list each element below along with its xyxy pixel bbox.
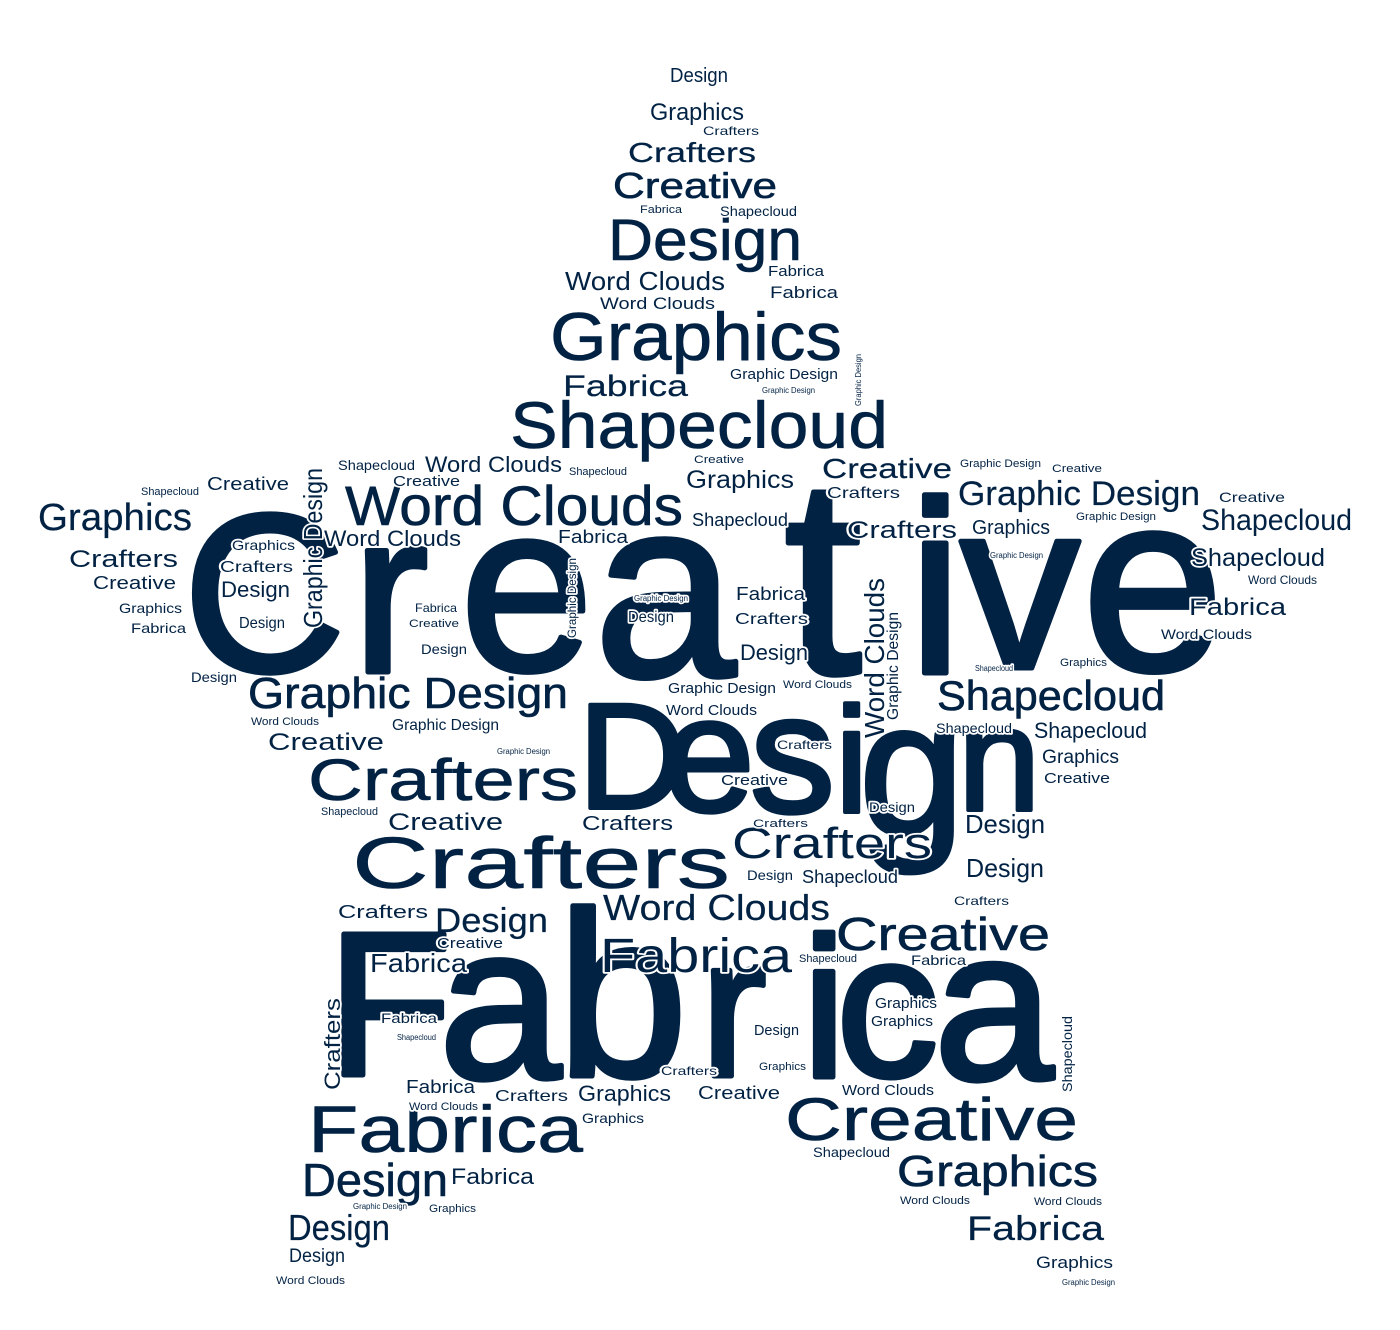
small words: bottom legs of star: Graphics xyxy=(1036,1253,1113,1272)
word: Design (large centre): D xyxy=(578,672,686,840)
word: Design (large centre): e xyxy=(663,662,755,846)
small words: lower centre: Design xyxy=(965,809,1045,839)
medium and large words: Crafters xyxy=(352,824,730,904)
small words: bottom legs of star: Creative xyxy=(698,1083,780,1103)
small words: lower centre: Creative xyxy=(437,935,503,952)
small words: lower centre: Word Clouds xyxy=(783,679,853,691)
word: Fabrica (large bottom): a xyxy=(934,884,1054,1125)
small words: centre band and left arm: Graphic Design xyxy=(298,468,328,628)
word: Creative (largest): v xyxy=(960,451,1080,719)
small words: centre band and left arm: Design xyxy=(740,640,808,665)
small words: right arm: Shapecloud xyxy=(1034,718,1147,743)
small words: lower centre: Shapecloud xyxy=(799,953,857,965)
small words: right arm: Creative xyxy=(1044,770,1110,787)
medium and large words: Shapecloud xyxy=(937,672,1165,719)
word: Fabrica (large bottom): a xyxy=(439,879,562,1125)
small words: centre band and left arm xyxy=(69,452,957,720)
word: Creative (largest): t xyxy=(784,421,863,733)
medium and large words: Crafters xyxy=(732,819,932,868)
medium and large words: Design xyxy=(302,1154,448,1206)
small words: lower centre: Shapecloud xyxy=(802,867,898,887)
small words: lower centre: Crafters xyxy=(753,818,809,830)
word: Design (large centre): g xyxy=(859,663,965,875)
word: Creative (largest): e xyxy=(460,453,593,721)
small words: bottom legs of star: Graphics xyxy=(582,1110,644,1126)
word: Design (large centre): i xyxy=(835,676,868,844)
small words: centre band and left arm: Design xyxy=(421,641,467,657)
small words: centre band and left arm: Fabrica xyxy=(415,601,457,615)
word: Design (large centre): n xyxy=(958,677,1040,842)
small words: centre band and left arm: Graphics xyxy=(686,466,794,494)
small words: bottom legs of star: Fabrica xyxy=(406,1077,476,1097)
small words: lower centre: Crafters xyxy=(338,902,428,922)
medium and large words: Creative xyxy=(836,908,1050,960)
small words: centre band and left arm: Fabrica xyxy=(131,620,186,636)
small words: lower centre xyxy=(251,679,1045,978)
small words: centre band and left arm: Fabrica xyxy=(558,527,629,547)
small words: bottom legs of star: Graphics xyxy=(429,1203,477,1215)
small words: bottom legs of star: Crafters xyxy=(495,1088,568,1105)
small words: centre band and left arm: Graphics xyxy=(119,600,182,616)
medium and large words: Design xyxy=(608,208,802,273)
small words: centre band and left arm: Creative xyxy=(207,474,289,494)
small words: right arm: Graphic Design xyxy=(990,551,1043,560)
small words: right arm: Creative xyxy=(1219,489,1285,505)
small words: centre band and left arm: Creative xyxy=(822,453,952,484)
small words: centre band and left arm: Shapecloud xyxy=(569,466,627,478)
small words: right arm xyxy=(936,458,1352,787)
small words: right arm: Graphic Design xyxy=(960,458,1041,470)
small words: centre band and left arm: Graphic Design xyxy=(634,594,688,603)
small words: right arm: Graphics xyxy=(972,517,1050,539)
small words: centre band and left arm: Design xyxy=(191,669,237,685)
word: Fabrica (large bottom): F xyxy=(327,890,452,1119)
word: Creative (largest): r xyxy=(352,464,429,721)
small words: lower centre: Graphic Design xyxy=(392,717,499,734)
small words: bottom legs of star: Word Clouds xyxy=(900,1195,971,1207)
small words: lower centre: Graphic Design xyxy=(497,747,550,756)
small words: top point of star: Fabrica xyxy=(770,283,839,302)
small words: bottom legs of star: Word Clouds xyxy=(276,1275,346,1287)
word: Creative (largest): e xyxy=(1082,440,1224,725)
small words: right arm: Graphic Design xyxy=(1076,511,1156,523)
small words: centre band and left arm: Fabrica xyxy=(736,584,806,604)
small words: top point of star: Graphics xyxy=(650,99,744,126)
small words: lower centre: Crafters xyxy=(777,738,832,752)
small words: right arm: Shapecloud xyxy=(1201,504,1352,537)
small words: bottom legs of star: Design xyxy=(754,1022,799,1039)
small words: top point of star: Graphic Design xyxy=(730,366,838,383)
small words: bottom legs of star: Graphic Design xyxy=(353,1202,407,1211)
small words: bottom legs of star: Crafters xyxy=(661,1064,717,1078)
small words: bottom legs of star: Graphics xyxy=(875,995,937,1012)
medium and large words: Graphics xyxy=(550,299,842,375)
medium and large words: Creative xyxy=(785,1086,1078,1153)
medium and large words: Word Clouds xyxy=(859,578,890,738)
medium and large words: Fabrica xyxy=(308,1092,583,1166)
small words: top point of star: Graphic Design xyxy=(762,386,815,395)
small words: centre band and left arm: Shapecloud xyxy=(141,486,199,498)
medium and large words: Word Clouds xyxy=(603,887,830,928)
medium and large words: Word Clouds xyxy=(345,474,683,537)
small words: centre band and left arm: Graphics xyxy=(232,537,295,553)
word: Fabrica (large bottom): c xyxy=(836,891,938,1120)
small words: centre band and left arm: Crafters xyxy=(847,517,957,544)
medium and large words: Creative xyxy=(613,165,777,206)
small words: lower centre: Fabrica xyxy=(370,948,468,978)
word: Creative (largest): C xyxy=(183,467,346,719)
small words: lower centre: Creative xyxy=(268,729,384,756)
word: Design (large centre): s xyxy=(750,659,835,849)
small words: bottom legs of star: Graphics xyxy=(871,1013,933,1030)
small words: centre band and left arm: Crafters xyxy=(69,546,178,573)
small words: bottom legs of star: Fabrica xyxy=(381,1010,437,1026)
word: Fabrica (large bottom): r xyxy=(700,896,767,1119)
small words: top point of star: Fabrica xyxy=(768,263,825,280)
small words: right arm: Graphics xyxy=(1060,657,1108,669)
medium and large words: Design xyxy=(288,1207,390,1248)
medium and large words: Graphics xyxy=(38,497,192,539)
small words: centre band and left arm: Design xyxy=(239,615,285,632)
small words: top point of star: Fabrica xyxy=(640,204,683,216)
small words: top point of star: Design xyxy=(670,65,728,87)
small words: centre band and left arm: Crafters xyxy=(220,559,293,576)
medium and large words: Graphic Design xyxy=(248,669,568,718)
medium and large words: Fabrica xyxy=(967,1210,1104,1248)
small words: centre band and left arm: Creative xyxy=(409,618,459,630)
small words: bottom legs of star: Fabrica xyxy=(451,1164,535,1189)
small words: lower centre: Fabrica xyxy=(911,952,966,968)
small words: centre band and left arm: Graphic Design xyxy=(885,612,902,720)
small words: bottom legs of star: Graphics xyxy=(578,1081,671,1106)
small words: bottom legs of star: Shapecloud xyxy=(813,1144,890,1160)
small words: bottom legs of star xyxy=(276,995,1115,1287)
medium and large words: Design xyxy=(435,902,548,940)
small words: bottom legs of star: Graphic Design xyxy=(1062,1278,1115,1287)
medium and large words: Graphics xyxy=(897,1147,1098,1196)
small words: top point of star: Graphic Design xyxy=(854,354,863,406)
small words: right arm: Shapecloud xyxy=(936,720,1012,736)
small words: right arm: Word Clouds xyxy=(1161,626,1252,642)
small words: top point of star: Fabrica xyxy=(563,370,688,403)
medium and large words xyxy=(38,165,1200,1248)
word: Creative (largest): i xyxy=(908,451,963,726)
small words: lower centre: Design xyxy=(747,867,793,883)
small words: bottom legs of star: Graphics xyxy=(759,1061,807,1073)
small words: centre band and left arm: Design xyxy=(221,577,290,602)
small words: centre band and left arm: Design xyxy=(628,609,674,626)
small words: bottom legs of star: Design xyxy=(289,1246,345,1267)
small words: right arm: Fabrica xyxy=(1189,594,1287,621)
small words: top point of star: Crafters xyxy=(628,137,756,168)
medium and large words: Graphic Design xyxy=(958,475,1200,513)
small words: bottom legs of star: Shapecloud xyxy=(397,1033,436,1042)
small words: centre band and left arm: Word Clouds xyxy=(425,452,562,477)
small words: top point of star: Crafters xyxy=(703,124,759,138)
small words: centre band and left arm: Creative xyxy=(93,573,176,593)
small words: centre band and left arm: Crafters xyxy=(735,611,808,628)
small words: lower centre: Design xyxy=(966,853,1044,883)
small words: lower centre: Shapecloud xyxy=(321,806,378,818)
medium and large words: Crafters xyxy=(308,748,578,813)
small words: lower centre: Crafters xyxy=(582,813,673,835)
small words: top point of star: Shapecloud xyxy=(720,203,797,219)
small words: bottom legs of star: Word Clouds xyxy=(409,1101,479,1113)
small words: centre band and left arm: Creative xyxy=(393,473,460,490)
small words: centre band and left arm: Word Clouds xyxy=(324,526,461,551)
small words: centre band and left arm: Crafters xyxy=(827,485,900,502)
small words: centre band and left arm: Shapecloud xyxy=(338,457,415,473)
small words: lower centre: Graphic Design xyxy=(668,680,776,697)
medium and large words: Shapecloud xyxy=(510,388,888,462)
small words: centre band and left arm: Shapecloud xyxy=(692,510,788,530)
small words: bottom legs of star: Word Clouds xyxy=(842,1082,934,1099)
word: Creative (largest): a xyxy=(594,446,736,731)
word: Fabrica (large bottom): b xyxy=(557,863,688,1126)
small words: right arm: Word Clouds xyxy=(1248,573,1317,587)
small words: lower centre: Crafters xyxy=(954,894,1009,908)
small words: right arm: Shapecloud xyxy=(975,664,1013,673)
small words: bottom legs of star: Word Clouds xyxy=(1034,1196,1103,1208)
word: Fabrica (large bottom): i xyxy=(802,897,846,1120)
small words: right arm: Shapecloud xyxy=(1191,544,1325,572)
small words: bottom legs of star: Shapecloud xyxy=(1059,1016,1075,1092)
small words: lower centre: Creative xyxy=(388,809,503,836)
small words: top point of star xyxy=(563,65,863,406)
small words: centre band and left arm: Graphic Design xyxy=(565,558,579,638)
medium and large words: Fabrica xyxy=(600,930,792,983)
small words: top point of star: Word Clouds xyxy=(600,294,715,313)
small words: right arm: Graphics xyxy=(1042,747,1119,768)
small words: lower centre: Word Clouds xyxy=(666,702,757,719)
small words: lower centre: Design xyxy=(869,799,915,815)
small words: top point of star: Word Clouds xyxy=(565,266,725,296)
small words: right arm: Creative xyxy=(1052,463,1102,475)
small words: lower centre: Word Clouds xyxy=(251,716,320,728)
small words: bottom legs of star: Crafters xyxy=(320,998,345,1090)
small words: centre band and left arm: Creative xyxy=(694,454,744,466)
small words: lower centre: Creative xyxy=(721,772,788,789)
